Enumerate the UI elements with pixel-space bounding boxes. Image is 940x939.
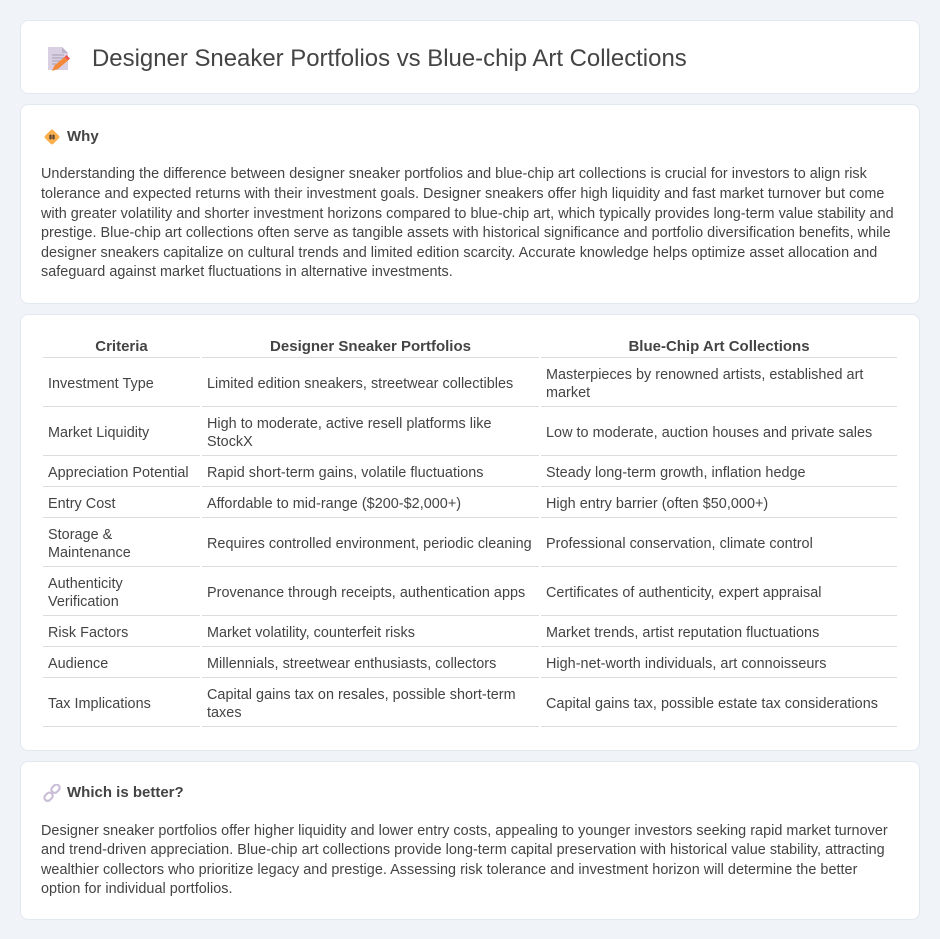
text: which is better paragraph: wealthier collectors who prioritize legacy and prestige. Assessing risk tolerance and investment horizon will determine the better [41,862,857,878]
table: comparison: Entry Cost [48,496,115,512]
table: comparison: Affordable to mid-range ($200-$2,000+) [207,496,461,512]
table: comparison: StockX [207,434,253,450]
table: comparison: Verification [48,594,119,610]
panel: which is better [20,761,920,920]
table: comparison: Certificates of authenticity, expert appraisal [546,585,821,601]
table: comparison: Market trends, artist reputation fluctuations [546,625,819,641]
text: why paragraph: prestige. Blue-chip art collections often serve as tangible assets with historical significance and portfolio diversification benefits, while [41,225,891,241]
text: which is better paragraph [41,823,888,897]
text: why paragraph: tolerance and expected returns with their investment goals. Designer sneakers offer high liquidity and fast market turnover but come [41,186,884,202]
table: comparison: Masterpieces by renowned artists, established art [546,367,863,383]
title: Designer Sneaker Portfolios vs Blue-chip Art Collections [92,45,687,72]
table: comparison: Audience [48,656,108,672]
table: comparison: Rapid short-term gains, volatile fluctuations [207,465,484,481]
table: comparison: Limited edition sneakers, streetwear collectibles [207,376,513,392]
table: comparison: Risk Factors [48,625,128,641]
table: comparison: Tax Implications [48,696,151,712]
table: comparison: Criteria [95,338,148,355]
panel: comparison table [20,314,920,751]
table: comparison: Storage & [48,527,112,543]
table: comparison: Steady long-term growth, inflation hedge [546,465,806,481]
table: comparison: Low to moderate, auction houses and private sales [546,425,872,441]
table: comparison: High entry barrier (often $50,000+) [546,496,768,512]
table: comparison: Authenticity [48,576,123,592]
table: comparison: taxes [207,705,242,721]
table: comparison: Investment Type [48,376,154,392]
text: why paragraph: Understanding the difference between designer sneaker portfolios and blue-chip art collections is crucial for investors to align risk [41,166,867,182]
table: comparison: Provenance through receipts, authentication apps [207,585,525,601]
table: comparison: Blue-Chip Art Collections [628,338,810,355]
table: comparison: Professional conservation, climate control [546,536,813,552]
table: comparison: Market Liquidity [48,425,149,441]
icon: warning diamond [44,130,60,144]
panel: title card [20,20,920,94]
text: why paragraph: safeguard against market fluctuations in alternative investments. [41,264,453,280]
table: comparison: Millennials, streetwear enthusiasts, collectors [207,656,496,672]
table: comparison: High-net-worth individuals, art connoisseurs [546,656,826,672]
icon: document with pencil [48,47,70,71]
table: comparison: Capital gains tax, possible estate tax considerations [546,696,878,712]
text: which is better paragraph: Designer sneaker portfolios offer higher liquidity and lower entry costs, appealing to younger investors seeking rapid market turnover [41,823,888,839]
heading: which is better: Which is better? [67,784,184,801]
table: comparison [43,338,897,727]
text: why paragraph [41,166,894,280]
table: comparison: Appreciation Potential [48,465,189,481]
table: comparison: Capital gains tax on resales, possible short-term [207,687,516,703]
text: why paragraph: with greater volatility and shorter investment horizons compared to blue-chip art, which typically provides long-term value stability and [41,206,894,222]
panel: why [20,104,920,304]
text: which is better paragraph: option for individual portfolios. [41,881,233,897]
table: comparison: High to moderate, active resell platforms like [207,416,492,432]
table: comparison: Designer Sneaker Portfolios [270,338,471,355]
heading: why: Why [67,128,99,145]
table: comparison: market [546,385,590,401]
text: why paragraph: designer sneakers capitalize on cultural trends and limited edition scarcity. Accurate knowledge helps optimize asset allocation and [41,245,877,261]
table: comparison: Market volatility, counterfeit risks [207,625,415,641]
table: comparison: Maintenance [48,545,131,561]
text: which is better paragraph: and trend-driven appreciation. Blue-chip art collections provide long-term capital preservation with historical value stability, attracting [41,842,885,858]
icon: chain link [43,784,61,802]
table: comparison: Requires controlled environment, periodic cleaning [207,536,532,552]
